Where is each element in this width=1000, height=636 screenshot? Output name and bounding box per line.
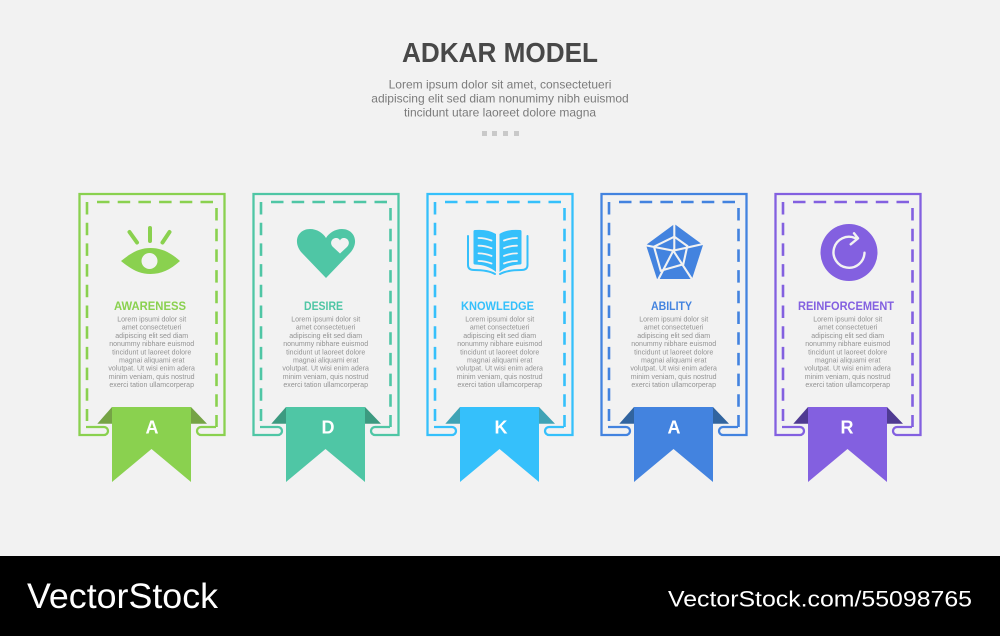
body text: Lorem ipsumi dolor sit [291, 316, 360, 324]
subtitle text: tincidunt utare laoreet dolore magna [404, 106, 596, 120]
ribbon folds [97, 407, 207, 424]
ribbon letter: R [840, 418, 854, 438]
body text: Lorem ipsumi dolor sit [813, 316, 882, 324]
body text: volutpat. Ut wisi enim adera [108, 366, 195, 373]
body text: magnai aliquami erat [119, 358, 184, 364]
body text: minim veniam, quis nostrud [805, 374, 891, 381]
body text: amet consectetueri [470, 325, 530, 332]
body text: tincidunt ut laoreet dolore [112, 349, 191, 356]
icon: eye [121, 228, 180, 274]
ribbon letter: A [668, 418, 680, 438]
panel: ability [602, 194, 746, 482]
body text: magnai aliquami erat [641, 358, 706, 364]
body text: exerci tation ullamcorperap [805, 382, 890, 389]
panel: awareness [80, 194, 224, 482]
body text: adipiscing elit sed diam [811, 333, 884, 340]
body text: nonummy nibhare euismod [457, 341, 542, 348]
footer logo: VectorStock [27, 577, 219, 616]
body text: amet consectetueri [818, 325, 878, 332]
card frame [428, 194, 572, 435]
body text: tincidunt ut laoreet dolore [460, 349, 539, 356]
body text: tincidunt ut laoreet dolore [808, 349, 887, 356]
ribbon folds [619, 407, 729, 424]
subtitle text: adipiscing elit sed diam nonumimy nibh euismod [371, 92, 629, 106]
heading: REINFORCEMENT [798, 301, 894, 313]
ribbon [634, 407, 713, 482]
body text: adipiscing elit sed diam [115, 333, 188, 340]
ribbon letter: D [322, 418, 334, 438]
footer bar [0, 556, 1000, 636]
body text: volutpat. Ut wisi enim adera [804, 366, 891, 373]
heading: KNOWLEDGE [461, 301, 534, 313]
body text: Lorem ipsumi dolor sit [639, 316, 708, 324]
ribbon letter: K [494, 418, 508, 438]
ribbon [808, 407, 887, 482]
body text: exerci tation ullamcorperap [457, 382, 542, 389]
body text: amet consectetueri [122, 325, 182, 332]
ribbon [112, 407, 191, 482]
body text: volutpat. Ut wisi enim adera [282, 366, 369, 373]
card frame [80, 194, 224, 435]
body text: amet consectetueri [644, 325, 704, 332]
icon: heart [297, 229, 355, 278]
icon: refresh circle [820, 224, 878, 281]
ribbon [286, 407, 365, 482]
heading: ABILITY [651, 301, 692, 313]
body text: exerci tation ullamcorperap [631, 382, 716, 389]
heading: DESIRE [304, 301, 343, 313]
ribbon folds [793, 407, 903, 424]
icon: open book [468, 230, 528, 274]
title dots [482, 131, 519, 136]
body text: minim veniam, quis nostrud [283, 374, 369, 381]
body text: minim veniam, quis nostrud [631, 374, 717, 381]
ribbon folds [445, 407, 555, 424]
body text: magnai aliquami erat [467, 358, 532, 364]
body text: magnai aliquami erat [293, 358, 358, 364]
body text: tincidunt ut laoreet dolore [286, 349, 365, 356]
body text: minim veniam, quis nostrud [457, 374, 543, 381]
body text: tincidunt ut laoreet dolore [634, 349, 713, 356]
heading: AWARENESS [114, 301, 186, 313]
card frame [602, 194, 746, 435]
body text: nonummy nibhare euismod [631, 341, 716, 348]
body text: nonummy nibhare euismod [283, 341, 368, 348]
footer image id: VectorStock.com/55098765 [668, 586, 972, 612]
panel: reinforcement [776, 194, 920, 482]
card frame [254, 194, 398, 435]
panel: desire [254, 194, 398, 482]
ribbon folds [271, 407, 381, 424]
body text: nonummy nibhare euismod [805, 341, 890, 348]
title: ADKAR MODEL [402, 37, 598, 68]
body text: Lorem ipsumi dolor sit [465, 316, 534, 324]
body text: adipiscing elit sed diam [289, 333, 362, 340]
body text: adipiscing elit sed diam [637, 333, 710, 340]
body text: Lorem ipsumi dolor sit [117, 316, 186, 324]
body text: minim veniam, quis nostrud [109, 374, 195, 381]
body text: exerci tation ullamcorperap [283, 382, 368, 389]
body text: exerci tation ullamcorperap [109, 382, 194, 389]
panel: knowledge [428, 194, 572, 482]
body text: adipiscing elit sed diam [463, 333, 536, 340]
body text: nonummy nibhare euismod [109, 341, 194, 348]
ribbon [460, 407, 539, 482]
card frame [776, 194, 920, 435]
body text: magnai aliquami erat [815, 358, 880, 364]
subtitle text: Lorem ipsum dolor sit amet, consectetueri [389, 78, 611, 92]
body text: volutpat. Ut wisi enim adera [456, 366, 543, 373]
body text: amet consectetueri [296, 325, 356, 332]
icon: pentagon web [644, 223, 703, 280]
ribbon letter: A [146, 418, 158, 438]
body text: volutpat. Ut wisi enim adera [630, 366, 717, 373]
